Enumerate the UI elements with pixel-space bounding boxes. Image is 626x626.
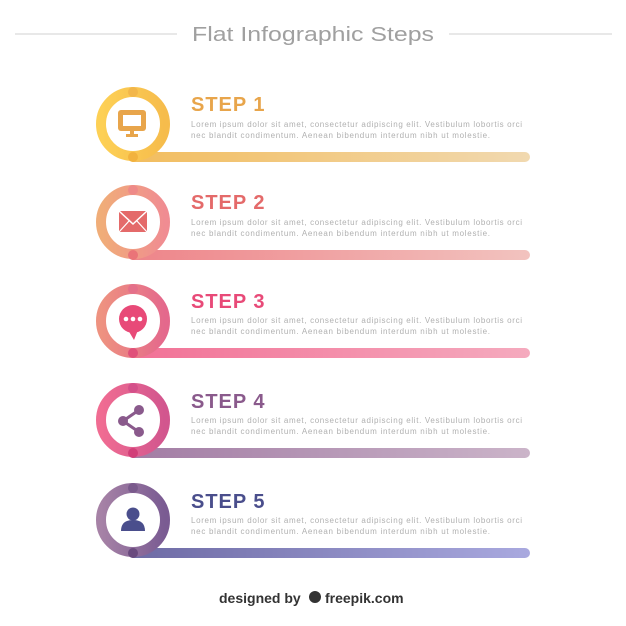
icon: envelope bbox=[119, 211, 147, 232]
footer credit: designed by bbox=[219, 590, 301, 606]
heading: step 1: STEP 1 bbox=[191, 94, 266, 116]
bar: step 3 bbox=[128, 348, 530, 358]
bar: step 2 bbox=[128, 250, 530, 260]
ring: step 1 bbox=[101, 92, 165, 156]
bar: step 4 bbox=[128, 448, 530, 458]
text: step 1: nec blandit condimentum. Aenean bibendum interdum nibh ut molestie. bbox=[191, 131, 490, 140]
text: step 5: nec blandit condimentum. Aenean bibendum interdum nibh ut molestie. bbox=[191, 527, 490, 536]
text: step 4: nec blandit condimentum. Aenean bibendum interdum nibh ut molestie. bbox=[191, 427, 490, 436]
bar: step 5 bbox=[128, 548, 530, 558]
text: step 3: Lorem ipsum dolor sit amet, consectetur adipiscing elit. Vestibulum lobortis orci bbox=[191, 316, 522, 325]
icon: chat bubble bbox=[119, 305, 147, 340]
text: step 2: nec blandit condimentum. Aenean bibendum interdum nibh ut molestie. bbox=[191, 229, 490, 238]
heading: step 4: STEP 4 bbox=[191, 391, 266, 413]
text: step 1: Lorem ipsum dolor sit amet, consectetur adipiscing elit. Vestibulum lobortis orci bbox=[191, 120, 522, 129]
text: step 5: Lorem ipsum dolor sit amet, consectetur adipiscing elit. Vestibulum lobortis orci bbox=[191, 516, 522, 525]
footer credit bbox=[219, 590, 404, 606]
icon: monitor bbox=[118, 110, 146, 137]
step 3 bbox=[101, 284, 530, 358]
step 5 bbox=[101, 483, 530, 558]
ring: step 4 bbox=[101, 388, 165, 452]
step 4 bbox=[101, 383, 530, 458]
ring: step 5 bbox=[101, 488, 165, 552]
heading: step 3: STEP 3 bbox=[191, 291, 266, 313]
text: step 3: nec blandit condimentum. Aenean bibendum interdum nibh ut molestie. bbox=[191, 327, 490, 336]
icon: share bbox=[118, 405, 144, 437]
step 1 bbox=[101, 87, 530, 162]
text: step 2: Lorem ipsum dolor sit amet, consectetur adipiscing elit. Vestibulum lobortis orci bbox=[191, 218, 522, 227]
heading: step 2: STEP 2 bbox=[191, 192, 266, 214]
ring: step 3 bbox=[101, 289, 165, 353]
heading: step 5: STEP 5 bbox=[191, 491, 266, 513]
title: Flat Infographic Steps bbox=[192, 24, 434, 46]
text: step 4: Lorem ipsum dolor sit amet, consectetur adipiscing elit. Vestibulum lobortis orci bbox=[191, 416, 522, 425]
icon: user bbox=[121, 508, 145, 531]
bar: step 1 bbox=[128, 152, 530, 162]
step 2 bbox=[101, 185, 530, 260]
ring: step 2 bbox=[101, 190, 165, 254]
footer credit: freepik.com bbox=[325, 590, 404, 606]
